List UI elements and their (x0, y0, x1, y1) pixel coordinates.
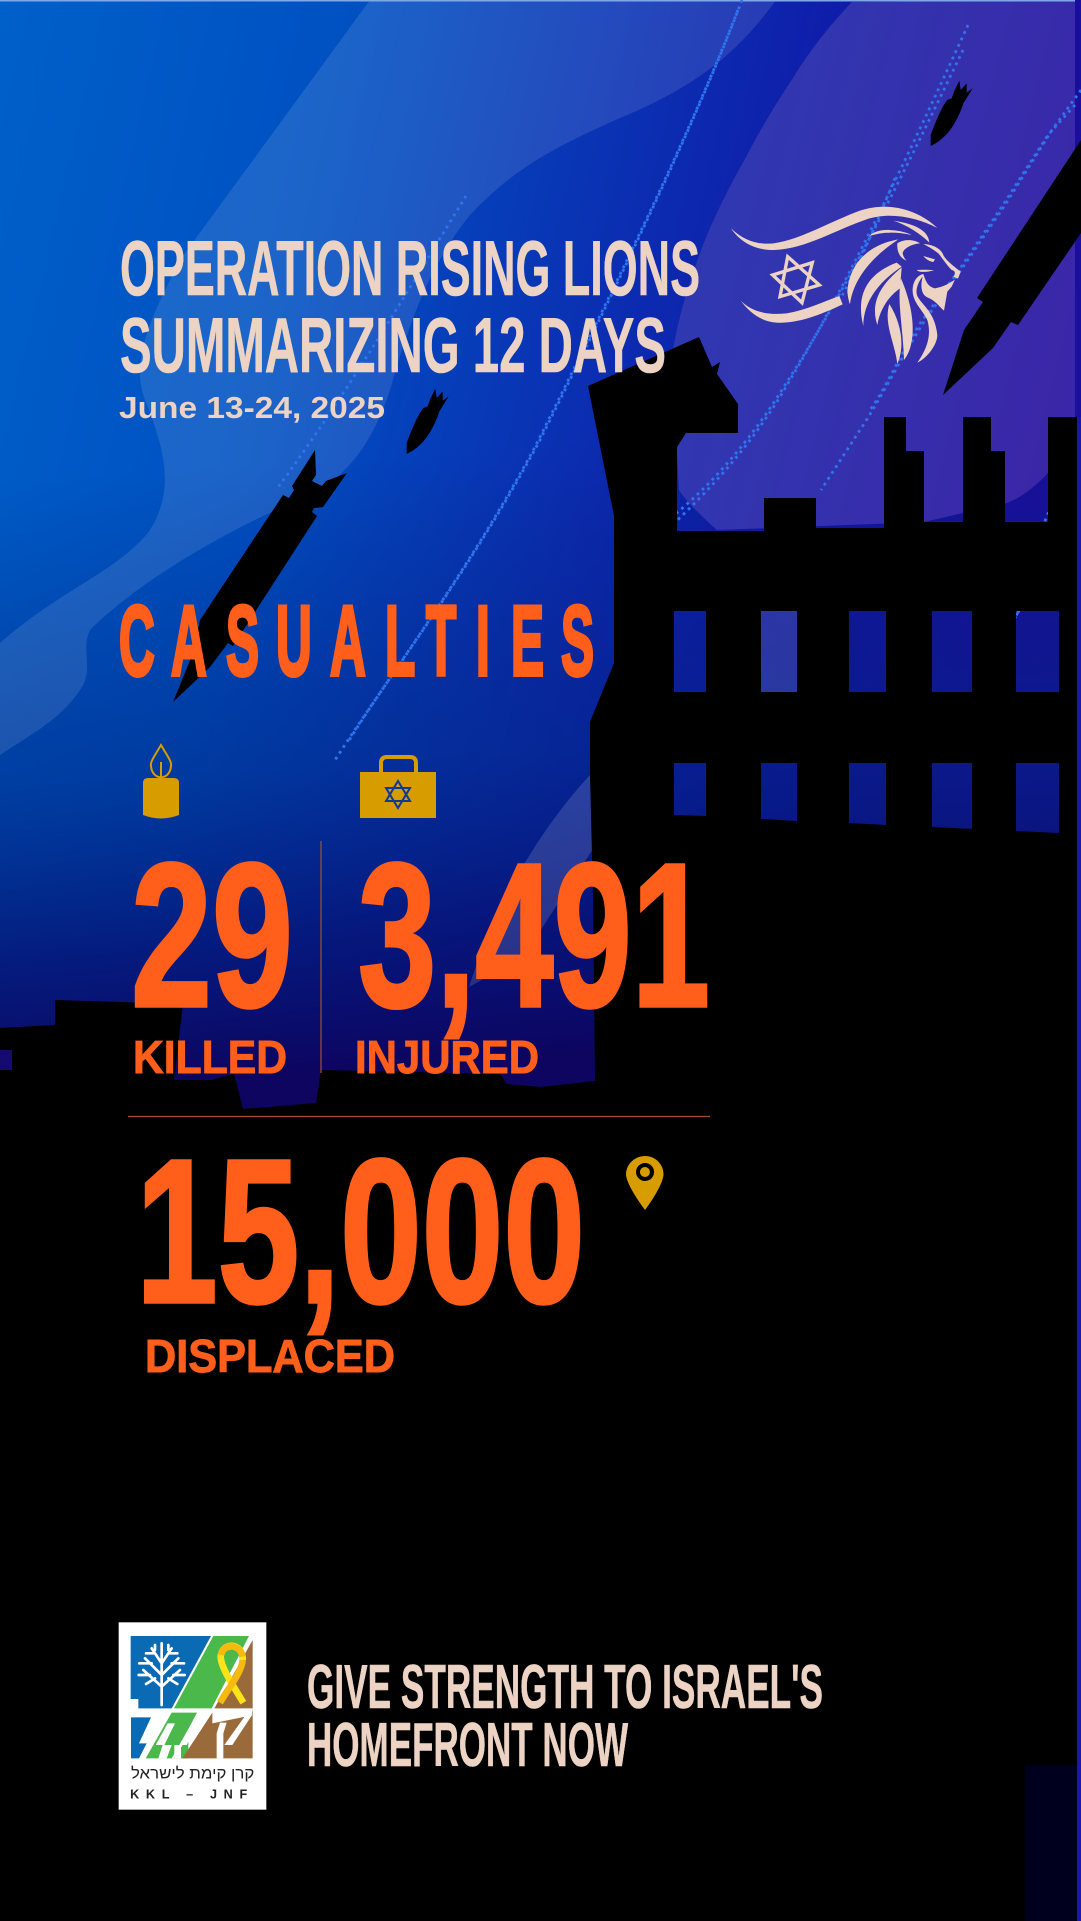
title (120, 224, 700, 389)
logo blue field with tree (131, 1636, 211, 1708)
light wave band (0, 0, 776, 755)
stat: killed: 29 (131, 821, 293, 1050)
logo brown field (214, 1640, 253, 1708)
lion head (847, 221, 961, 364)
stat: killed: KILLED (133, 1031, 287, 1083)
tracer dotted lines (276, 0, 1081, 760)
purple wave shape (672, 0, 1081, 530)
icon: briefcase with star (360, 757, 436, 818)
logo: flag and lion (731, 207, 961, 364)
logo green field (174, 1636, 249, 1708)
stat: displaced (136, 1117, 585, 1382)
call to action (307, 1653, 823, 1780)
logo ribbon (220, 1646, 243, 1703)
bomb: centre (407, 389, 449, 454)
logo: KKL-JNF (119, 1622, 266, 1810)
stat: displaced: 15,000 (136, 1117, 585, 1346)
logo white card (119, 1622, 266, 1810)
stat: injured: INJURED (355, 1031, 539, 1083)
light patch in window (761, 611, 797, 692)
stat: injured: 3,491 (358, 821, 710, 1050)
flag waves and star (731, 207, 937, 323)
logo latin text: KKL – JNF (130, 1788, 254, 1802)
logo tree (139, 1643, 185, 1705)
icon: location pin (626, 1156, 664, 1210)
lower light wave (469, 775, 593, 987)
stat: killed (131, 821, 293, 1083)
missile: right large (943, 140, 1081, 395)
stat: displaced: DISPLACED (145, 1330, 395, 1382)
call to action line 2: HOMEFRONT NOW (307, 1711, 628, 1780)
icon: memorial candle (143, 745, 179, 818)
top edge highlight (0, 0, 1081, 2)
vertical darkening (0, 0, 1081, 1200)
date: June 13-24, 2025 (119, 390, 385, 425)
divider vertical (320, 841, 322, 1073)
dark corner block (1025, 1765, 1077, 1921)
right edge strip lower (1077, 417, 1081, 1921)
divider horizontal (128, 1116, 710, 1118)
logo hebrew text: קרן קימת לישראל (131, 1765, 254, 1783)
missile: left large (173, 450, 347, 702)
stat: injured (355, 821, 710, 1083)
rubble window at left (0, 1050, 12, 1070)
title line 2: SUMMARIZING 12 DAYS (120, 301, 666, 389)
logo lower letter mark (131, 1709, 253, 1758)
heading: casualties: CASUALTIES (119, 585, 594, 697)
right edge strip upper (1075, 0, 1081, 420)
bomb: top right (931, 81, 973, 146)
